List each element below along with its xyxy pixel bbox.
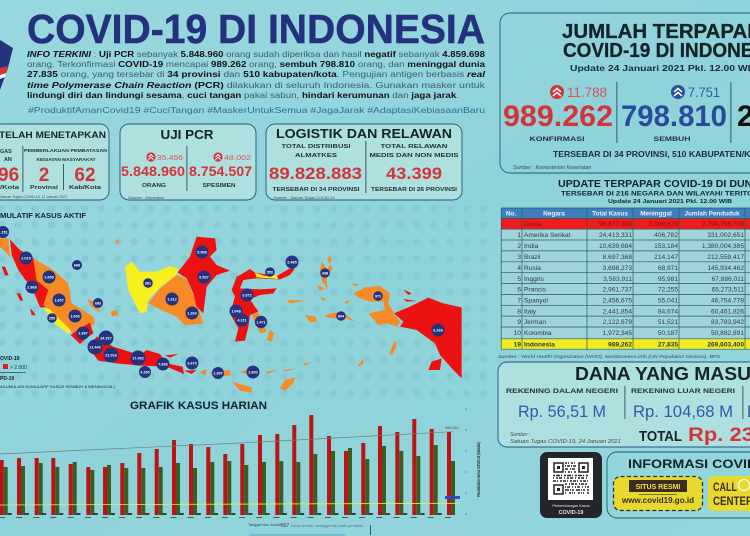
panel: telah menetapkan: KEGIATAN MASYARAKAT — [37, 157, 96, 163]
map markers: active cases per province: 1.048 — [231, 310, 241, 314]
table: negara terpapar: 269,603,400 — [707, 342, 744, 348]
title: COVID-19 DI INDONESIA — [27, 6, 485, 52]
panel: logistik dan relawan: TERSEBAR DI 34 PROVINSI — [272, 187, 360, 193]
panel: dana yang masuk: Sumber : — [510, 432, 531, 438]
button: call center — [708, 476, 750, 511]
map markers: active cases per province: 3.372 — [242, 294, 252, 298]
map legend: PD-19 — [0, 376, 14, 382]
chart title: GRAFIK KASUS HARIAN — [130, 400, 267, 412]
panel: uji pcr: Sumber : Kemenkes — [128, 195, 164, 200]
table: negara terpapar: 214,147 — [654, 254, 678, 261]
table: negara terpapar: 84,674 — [658, 308, 678, 316]
map markers: active cases per province: 7.836 — [158, 362, 168, 366]
panel: dana yang masuk: Rp. 56,51 M — [518, 403, 606, 421]
panel: jumlah terpapar: Update 24 Januari 2021 Pkl. 12.00 WIB — [570, 64, 750, 73]
table: negara terpapar: Meninggal — [640, 210, 672, 218]
qr code tile: Perkembangan Kasus — [552, 504, 590, 508]
map legend: > 2.000 — [10, 365, 27, 371]
panel: jumlah terpapar: Sumber : Kementerian Kesehatan — [513, 165, 591, 171]
table: negara terpapar: 65,273,511 — [711, 286, 744, 294]
map markers: active cases per province: 1.893 — [248, 370, 258, 374]
table: negara terpapar: Dunia — [524, 221, 542, 228]
text block: info terkini — [27, 50, 486, 100]
map markers: active cases per province: 971 — [375, 294, 381, 298]
qr code tile — [540, 452, 602, 518]
table: negara terpapar: 50,882,891 — [711, 330, 744, 337]
panel: jumlah terpapar: 11.788 — [567, 85, 607, 100]
table: negara terpapar: 67,886,011 — [711, 276, 744, 283]
table: negara terpapar: 9 — [517, 319, 521, 326]
map markers: active cases per province — [0, 226, 444, 379]
table: negara terpapar: India — [524, 243, 539, 250]
heading: update terpapar dunia — [558, 179, 750, 205]
map markers: active cases per province: 4.311 — [237, 318, 247, 322]
map heading: MULATIF KASUS AKTIF — [0, 211, 86, 220]
map markers: active cases per province: 259 — [49, 316, 55, 320]
table: negara terpapar: Total Kasus — [592, 210, 628, 218]
hashtags: #ProduktifAmanCovid19 #CuciTangan #MaskerUntukSemua #JagaJarak #AdaptasiKebiasaanBaru — [28, 105, 485, 115]
table: negara terpapar: Inggris — [524, 276, 544, 283]
table: negara terpapar: 27,835 — [658, 342, 678, 348]
chart footnote — [248, 523, 371, 536]
map markers: active cases per province: 668 — [74, 264, 80, 268]
chart footnote: 897 — [281, 523, 290, 529]
map markers: active cases per province: 5.908 — [197, 250, 207, 254]
table: negara terpapar: 406,782 — [654, 232, 678, 239]
table: negara terpapar: 7,794,798,739 — [702, 221, 744, 228]
table: negara terpapar: 10,639,684 — [599, 243, 632, 250]
map markers: active cases per province: 1.471 — [256, 320, 266, 324]
map markers: active cases per province: 552 — [267, 270, 273, 274]
map markers: active cases per province: 2.015 — [21, 256, 31, 260]
date labels — [0, 516, 455, 518]
table: negara terpapar: Jumlah Penduduk — [684, 210, 740, 218]
map markers: active cases per province: 438 — [322, 272, 328, 276]
text block: info terkini: lindungi diri dan lindungi sesama , cuci tangan pakai sabun, hindari kerumunan dan jaga jarak . — [27, 91, 459, 100]
table: negara terpapar: 2,456,675 — [603, 298, 632, 304]
panel: logistik dan relawan: ALMATKES — [295, 153, 337, 159]
table: negara terpapar: Kolombia — [524, 330, 552, 337]
panel: uji pcr: SPESIMEN — [202, 183, 236, 189]
table: negara terpapar — [501, 208, 750, 349]
last value label: 989.262 — [445, 426, 459, 430]
table: negara terpapar: 4 — [517, 265, 521, 272]
panel: telah menetapkan — [0, 124, 109, 200]
map markers: active cases per province: 2.465 — [287, 260, 297, 264]
map markers: active cases per province: 1.659 — [44, 276, 54, 280]
table: negara terpapar: 1 — [517, 232, 521, 239]
table: negara terpapar: 2,961,737 — [603, 286, 632, 294]
panel: dana yang masuk: TOTAL — [639, 429, 682, 445]
table: negara terpapar: Amerika Serikat — [524, 232, 571, 239]
panel: uji pcr: 48.002 — [224, 153, 251, 162]
panel: dana yang masuk — [498, 362, 750, 447]
table: negara terpapar: Indonesia — [524, 342, 555, 348]
table: negara terpapar: 1,380,004,385 — [702, 243, 744, 250]
table: negara terpapar: 331,002,651 — [707, 232, 744, 239]
panel: dana yang masuk: Rp. 104,68 M — [633, 403, 733, 421]
table source: Sumber : World Health Organization (WHO), worldometers.info (UN Population Division), BPS — [498, 354, 721, 360]
panel: telah menetapkan: Provinsi — [30, 185, 58, 191]
map markers: active cases per province: 381 — [145, 282, 151, 286]
panel: jumlah terpapar: TERSEBAR DI 34 PROVINSI, 510 KABUPATEN/KOTA — [553, 150, 750, 159]
panel: telah menetapkan: GAS — [0, 149, 12, 155]
icon: increase pcr spesimen — [213, 152, 223, 162]
panel: telah menetapkan: 2 — [39, 165, 49, 186]
panel: logistik dan relawan — [266, 124, 462, 200]
map markers: active cases per province: 1.263 — [187, 312, 197, 316]
map: eastern indonesia — [230, 255, 462, 391]
table: negara terpapar: Spanyol — [524, 298, 548, 304]
table: negara terpapar: 2,441,854 — [603, 308, 632, 316]
panel: informasi covid-19 — [607, 452, 750, 518]
table: negara terpapar: 6 — [517, 286, 521, 294]
bars: confirmed cases — [0, 415, 451, 515]
icon: increase pcr orang — [146, 152, 156, 162]
panel: logistik dan relawan: TOTAL DISTRIBUSI — [282, 144, 351, 150]
panel: jumlah terpapar — [500, 13, 750, 173]
panel: uji pcr: ORANG — [142, 183, 167, 189]
panel: dana yang masuk: DANA YANG MASUK — [575, 364, 750, 384]
table: negara terpapar: 3,698,273 — [603, 265, 632, 272]
table: negara terpapar: 2,122,679 — [603, 319, 632, 326]
bars: recovered cases — [4, 445, 455, 515]
map legend — [0, 356, 116, 389]
icon: increase sembuh — [671, 85, 685, 99]
table: negara terpapar: 1,972,345 — [603, 330, 632, 337]
map markers: active cases per province: 4.200 — [140, 370, 150, 374]
map legend: OVID-19 — [0, 356, 20, 362]
right axis — [465, 409, 481, 514]
map markers: active cases per province: 6.537 — [199, 276, 209, 280]
table: negara terpapar: 72,255 — [658, 286, 678, 294]
table: negara terpapar: 96,877,399 — [599, 221, 632, 228]
table: negara terpapar: 2 — [517, 243, 521, 250]
heading: update terpapar dunia: TERSEBAR DI 216 NEGARA DAN WILAYAH/ TERITORI — [561, 190, 750, 198]
heading: update terpapar dunia: UPDATE TERPAPAR COVID-19 DI DUNIA — [558, 179, 750, 190]
button: situs resmi — [614, 476, 702, 510]
panel: telah menetapkan: /Kota — [0, 185, 20, 191]
panel: dana yang masuk: REKENING DALAM NEGERI — [506, 388, 618, 395]
map markers: active cases per province: 6.168 — [433, 328, 443, 332]
table: negara terpapar: No. — [506, 210, 516, 218]
table: negara terpapar: 145,934,462 — [707, 265, 744, 272]
map: western indonesia — [0, 237, 252, 393]
bars: deaths — [8, 513, 455, 515]
table: negara terpapar: 51,521 — [658, 319, 678, 326]
panel: logistik dan relawan: 89.828.883 — [269, 164, 362, 183]
table: negara terpapar: 83,783,942 — [711, 319, 744, 326]
chart: daily cases bars — [0, 409, 481, 518]
logo: shield — [0, 40, 13, 90]
map markers: active cases per province: 3.473 — [187, 362, 197, 366]
panel: jumlah terpapar: 798.810 — [621, 100, 727, 133]
table: negara terpapar: 46,754,778 — [711, 298, 744, 304]
map markers: active cases per province: 1.657 — [54, 298, 64, 302]
text block: info terkini: time Polymerase Chain Reaction (PCR) dilakukan di seluruh Indonesia. Gunakan masker untuk — [27, 81, 486, 90]
table: negara terpapar: 989,262 — [608, 342, 632, 348]
panel: telah menetapkan: Satuan Tugas COVID-19, 11 Januari 2021 — [0, 195, 67, 199]
panel: telah menetapkan: Kab/Kota — [69, 185, 102, 191]
table: negara terpapar: 7 — [517, 298, 521, 304]
panel: jumlah terpapar: KONFIRMASI — [530, 136, 585, 143]
table: negara terpapar: Brazil — [524, 254, 541, 261]
panel: uji pcr: 35.456 — [157, 153, 183, 162]
table: negara terpapar: 3 — [517, 254, 521, 261]
table: negara terpapar: 8,697,368 — [603, 254, 632, 261]
panel: logistik dan relawan: MEDIS DAN NON MEDIS — [370, 153, 459, 159]
table: negara terpapar: 5 — [517, 276, 521, 283]
panel: logistik dan relawan: TERSEBAR DI 26 PROVINSI — [371, 187, 457, 193]
text block: info terkini: INFO TERKINI : Uji PCR sebanyak 5.848.960 orang sudah diperiksa dan hasil negatif sebanyak 4.859.698 — [27, 50, 486, 59]
table: negara terpapar: Prancis — [524, 286, 547, 294]
blue highlight — [445, 496, 460, 499]
panel: uji pcr: 8.754.507 — [189, 164, 252, 179]
panel: uji pcr — [120, 124, 256, 200]
text block: info terkini: orang. Terkonfirmasi COVID-19 mencapai 989.262 orang, sembuh 798.810 orang, dan meninggal dunia — [27, 60, 486, 69]
panel: uji pcr: 5.848.960 — [121, 164, 185, 179]
baseline value line — [0, 503, 458, 505]
qr code tile: COVID-19 — [559, 510, 583, 516]
panel: logistik dan relawan: 43.399 — [386, 164, 442, 183]
table: negara terpapar: Italy — [524, 308, 537, 316]
chart footnote: Kasus sembuh, meninggal dan positif per harian — [291, 524, 363, 528]
panel: jumlah terpapar: SEMBUH — [654, 136, 691, 143]
icon: increase konfirmasi — [550, 85, 564, 99]
map legend: AKUMULASI KUMULATIF KASUS SEMBUH & MENINGGAL) — [0, 384, 116, 389]
table: negara terpapar: Jerman — [524, 319, 546, 326]
table: negara terpapar: 60,461,826 — [711, 308, 744, 316]
heading: update terpapar dunia: Update 24 Januari 2021 Pkl. 12.00 WIB — [608, 199, 732, 205]
table: negara terpapar: 55,041 — [658, 298, 678, 304]
panel: dana yang masuk: Satuan Tugas COVID-19, 24 Januari 2021 — [510, 439, 621, 445]
panel: jumlah terpapar: 7.751 — [688, 85, 720, 100]
panel: telah menetapkan: AN — [4, 157, 12, 163]
map markers: active cases per province: 11.440 — [89, 346, 101, 350]
button: situs resmi: www.covid19.go.id — [621, 496, 694, 505]
table: negara terpapar: 50,187 — [658, 330, 678, 337]
table: negara terpapar: 2,098,879 — [649, 221, 678, 228]
table: negara terpapar: 24,413,331 — [599, 232, 632, 239]
map markers: active cases per province: 17.402 — [132, 356, 144, 360]
text block: info terkini: 27.835 orang, yang tersebar di 34 provinsi dan 510 kabupaten/kota . Pengujian antigen berbasis real — [27, 70, 486, 79]
panel: dana yang masuk: Rp. 23 — [688, 424, 750, 446]
panel: logistik dan relawan: Sumber : Satuan Tugas COVID-19 — [273, 195, 335, 200]
trend line — [0, 432, 453, 454]
panel: uji pcr: UJI PCR — [160, 127, 214, 142]
map markers: active cases per province: 804 — [338, 314, 345, 318]
panel: jumlah terpapar: 989.262 — [503, 100, 613, 133]
map markers: active cases per province: 1.397 — [78, 332, 88, 336]
table: negara terpapar: 10 — [514, 330, 521, 337]
chart footnote: Tanggal dan Jumlah — [248, 523, 282, 527]
table: negara terpapar: 95,981 — [658, 276, 678, 283]
map markers: active cases per province: 2.868 — [27, 286, 37, 290]
table: negara terpapar: Rusia — [524, 265, 541, 272]
panel: logistik dan relawan: TOTAL RELAWAN — [380, 144, 448, 150]
table: negara terpapar: 212,559,417 — [707, 254, 744, 261]
panel: dana yang masuk: REKENING LUAR NEGERI — [631, 388, 735, 395]
map markers: active cases per province: 1.397 — [213, 372, 223, 376]
map markers: active cases per province: 683 — [95, 302, 101, 306]
panel: telah menetapkan: TELAH MENETAPKAN — [0, 129, 106, 140]
button: call center: CALL — [713, 480, 737, 494]
map markers: active cases per province: 24.927 — [100, 336, 112, 340]
panel: telah menetapkan: PEMBERLAKUAN PEMBATASAN — [24, 148, 108, 154]
map markers: active cases per province: 21.016 — [105, 354, 117, 358]
button: situs resmi: SITUS RESMI — [636, 484, 680, 491]
right axis: Penambahan Harian COVID-19 (Sebulan) — [476, 442, 481, 497]
panel: telah menetapkan: 62 — [74, 165, 96, 186]
table: negara terpapar: 68,971 — [658, 265, 678, 272]
table: negara terpapar: 8 — [517, 308, 521, 316]
table: negara terpapar: 153,184 — [654, 243, 678, 250]
qr modules — [553, 463, 589, 494]
table: negara terpapar: 19 — [514, 342, 521, 348]
map markers: active cases per province: 1.312 — [167, 298, 177, 302]
table: negara terpapar: Negara — [543, 210, 565, 218]
table: negara terpapar: 3,583,911 — [603, 276, 632, 283]
panel: logistik dan relawan: LOGISTIK DAN RELAWAN — [276, 126, 452, 141]
map markers: active cases per province: 1.043 — [70, 314, 80, 318]
